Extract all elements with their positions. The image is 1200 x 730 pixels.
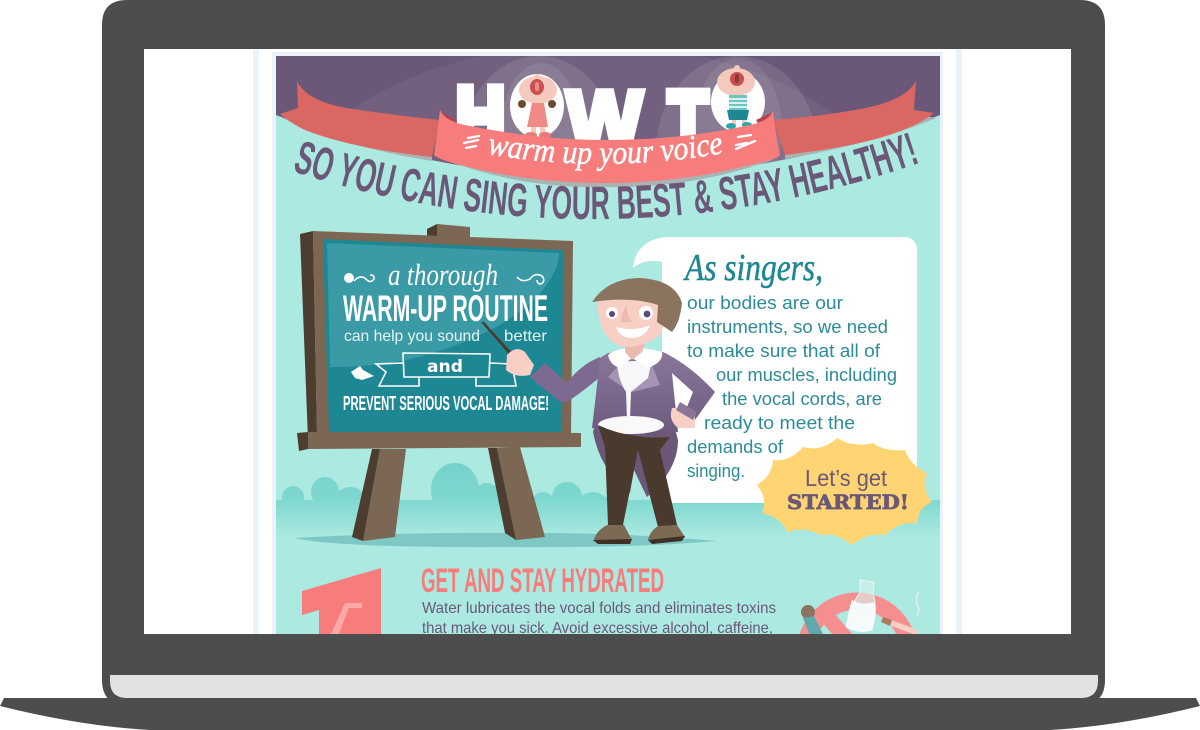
title: HOW TO: T	[668, 74, 708, 168]
screen background	[144, 49, 1071, 635]
title: HOW TO: W	[567, 74, 643, 168]
hair	[592, 278, 682, 332]
bubble body text: ready to meet the	[704, 413, 855, 433]
chalkboard text: warm-up routine: WARM-UP ROUTINE	[343, 288, 548, 329]
coat body	[592, 352, 715, 432]
burst callout: let's get started: STARTED!	[787, 490, 909, 514]
chalkboard text: can help you sound better: can help you sound	[344, 328, 480, 345]
pointer and hand	[481, 322, 534, 376]
laptop hinge strip	[110, 675, 1098, 698]
bubble body text: our bodies are our	[687, 293, 843, 313]
banner stripes	[464, 135, 755, 149]
title: HOW TO	[456, 70, 765, 168]
shoes	[593, 525, 685, 544]
chalkboard	[323, 239, 563, 432]
chalkboard text: can help you sound better: better	[504, 328, 548, 345]
speech bubble	[633, 237, 917, 503]
head	[597, 298, 665, 347]
title: HOW TO: H	[456, 70, 505, 164]
hand on hip	[671, 408, 695, 428]
burst callout: let's get started: Let’s get	[805, 465, 888, 491]
headline: SO YOU CAN SING YOUR BEST & STAY HEALTHY!	[294, 132, 918, 220]
bubble body text: demands of	[687, 437, 784, 457]
bubble heading: As singers,	[683, 247, 823, 289]
section 1 text: that make you sick. Avoid excessive alcohol, caffeine,	[422, 620, 773, 637]
nose	[621, 304, 632, 322]
subtitle on banner: warm up your voice	[490, 136, 722, 172]
banner ribbon	[280, 81, 936, 187]
collar	[608, 348, 662, 368]
background hills	[276, 463, 940, 540]
icon: singing boy	[717, 65, 755, 129]
coat tails	[593, 410, 678, 497]
icon: no sign with bottle, salt and cigarette	[801, 580, 919, 705]
easel	[297, 224, 581, 541]
character: teacher	[530, 278, 715, 544]
chalk ribbon: and	[351, 353, 516, 386]
chalk ribbon: and: and	[427, 357, 463, 377]
bubble body text: singing.	[687, 461, 745, 481]
section 1 numeral	[302, 568, 381, 636]
bubble body text: to make sure that all of	[687, 341, 881, 361]
neck	[625, 343, 645, 360]
bubble body text: the vocal cords, are	[722, 389, 882, 409]
chalkboard text: a thorough: a thorough	[388, 257, 498, 292]
smile	[616, 325, 650, 338]
bubble body text	[687, 293, 897, 481]
shirt	[617, 360, 652, 420]
section 1 heading: GET AND STAY HYDRATED	[421, 562, 664, 600]
chalkboard text: a thorough	[344, 257, 544, 292]
ground shadow	[294, 533, 716, 547]
section 1 text	[422, 600, 776, 637]
ear	[661, 309, 679, 327]
icon: singing girl	[518, 74, 557, 138]
bubble body text: instruments, so we need	[687, 317, 888, 337]
section 1 text: Water lubricates the vocal folds and eliminates toxins	[422, 600, 776, 617]
laptop base	[0, 698, 1200, 730]
burst callout: let's get started	[757, 438, 932, 545]
trousers	[598, 425, 677, 527]
header: purple stage with spotlights	[276, 56, 940, 166]
chalkboard text: can help you sound better	[344, 328, 548, 345]
chalkboard text: prevent serious vocal damage: PREVENT SERIOUS VOCAL DAMAGE!	[343, 393, 549, 415]
bubble body text: our muscles, including	[716, 365, 897, 385]
pointing arm	[530, 357, 600, 402]
eyes	[606, 306, 653, 320]
lapels	[608, 365, 660, 392]
